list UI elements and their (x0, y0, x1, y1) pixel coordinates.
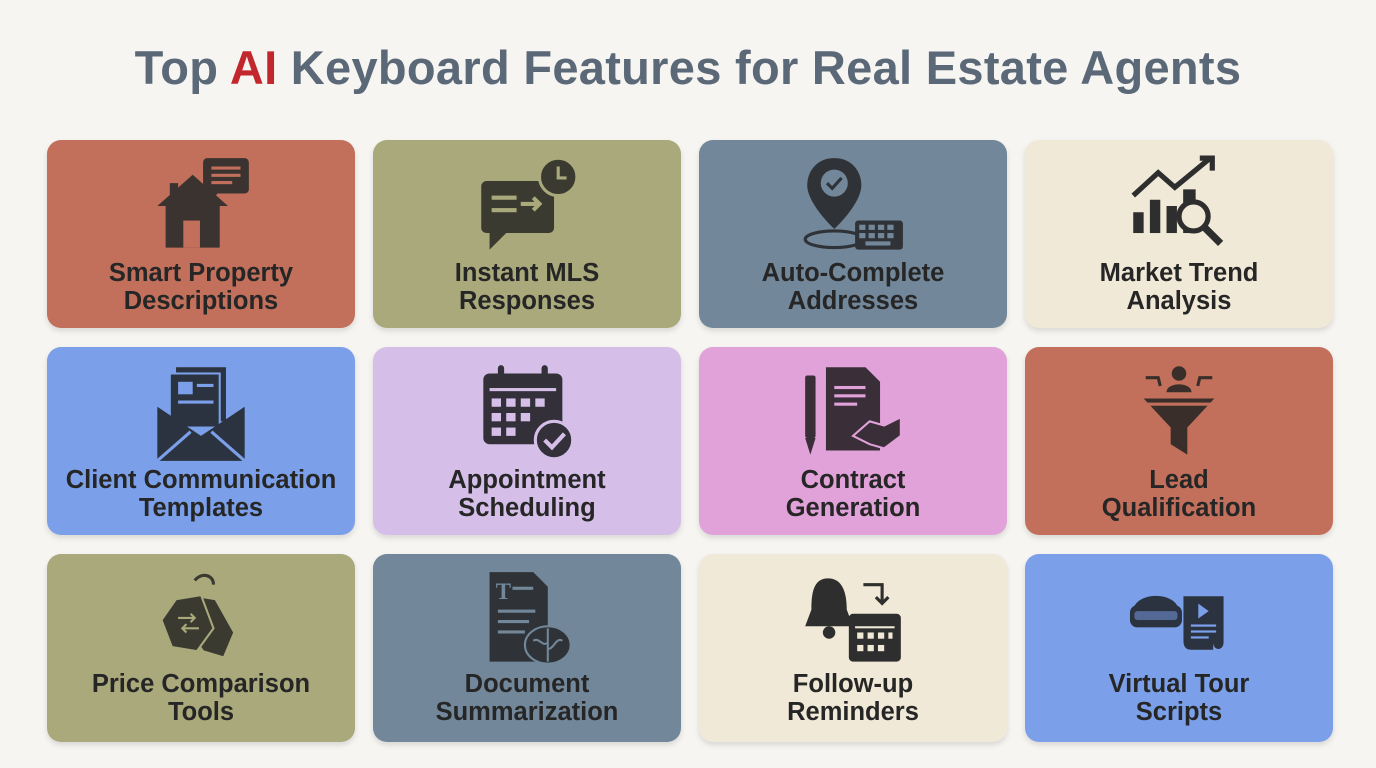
card: Smart Property Descriptions (47, 140, 355, 328)
card: Virtual Tour Scripts (1025, 554, 1333, 742)
icon: funnel with person (1144, 366, 1214, 454)
card: Contract Generation (699, 347, 1007, 535)
card: Follow-up Reminders: Follow-up (793, 670, 913, 698)
title: Top AI Keyboard Features for Real Estate Agents (135, 41, 1241, 94)
icon: pen, document, handshake (805, 367, 900, 454)
icon: price tags (162, 574, 234, 656)
card: Price Comparison Tools: Tools (168, 698, 234, 726)
card: Client Communication Templates: Client Communication (66, 466, 336, 494)
card: Appointment Scheduling: Scheduling (458, 494, 596, 522)
card: Auto-Complete Addresses (699, 140, 1007, 328)
card: Appointment Scheduling: Appointment (448, 466, 606, 494)
icon: bell with calendar (805, 578, 901, 662)
card: Lead Qualification (1025, 347, 1333, 535)
icon: map pin with keyboard (804, 158, 903, 250)
card: Follow-up Reminders: Reminders (787, 698, 919, 726)
icon: VR headset with script scroll (1130, 596, 1224, 650)
card: Contract Generation: Contract (801, 466, 905, 494)
card: Smart Property Descriptions: Descriptions (124, 287, 278, 315)
card: Market Trend Analysis (1025, 140, 1333, 328)
card: Smart Property Descriptions: Smart Property (109, 259, 293, 287)
card: Client Communication Templates: Templates (139, 494, 263, 522)
card: Market Trend Analysis: Analysis (1127, 287, 1231, 315)
card: Instant MLS Responses: Instant MLS (455, 259, 599, 287)
card: Appointment Scheduling (373, 347, 681, 535)
card: Market Trend Analysis: Market Trend (1100, 259, 1258, 287)
icon: chart with magnifier (1132, 156, 1224, 246)
card: Virtual Tour Scripts: Scripts (1136, 698, 1222, 726)
card: Document Summarization (373, 554, 681, 742)
card: Virtual Tour Scripts: Virtual Tour (1109, 670, 1249, 698)
icon: envelope with documents (157, 367, 245, 461)
card: Document Summarization: Document (465, 670, 589, 698)
card: Follow-up Reminders (699, 554, 1007, 742)
card: Lead Qualification: Qualification (1102, 494, 1256, 522)
card: Price Comparison Tools (47, 554, 355, 742)
icon: house with speech bubble (158, 158, 249, 248)
card: Contract Generation: Generation (786, 494, 920, 522)
icon: chat with clock (481, 160, 576, 250)
card: Auto-Complete Addresses: Addresses (788, 287, 918, 315)
icon: calendar with check (483, 365, 572, 458)
card: Document Summarization: Summarization (436, 698, 618, 726)
icon: document with brain (490, 572, 570, 663)
card: Client Communication Templates (47, 347, 355, 535)
card: Instant MLS Responses (373, 140, 681, 328)
card: Auto-Complete Addresses: Auto-Complete (762, 259, 944, 287)
card: Instant MLS Responses: Responses (459, 287, 595, 315)
card: Price Comparison Tools: Price Comparison (92, 670, 310, 698)
icon: document with brain: T (496, 579, 511, 604)
card: Lead Qualification: Lead (1149, 466, 1209, 494)
